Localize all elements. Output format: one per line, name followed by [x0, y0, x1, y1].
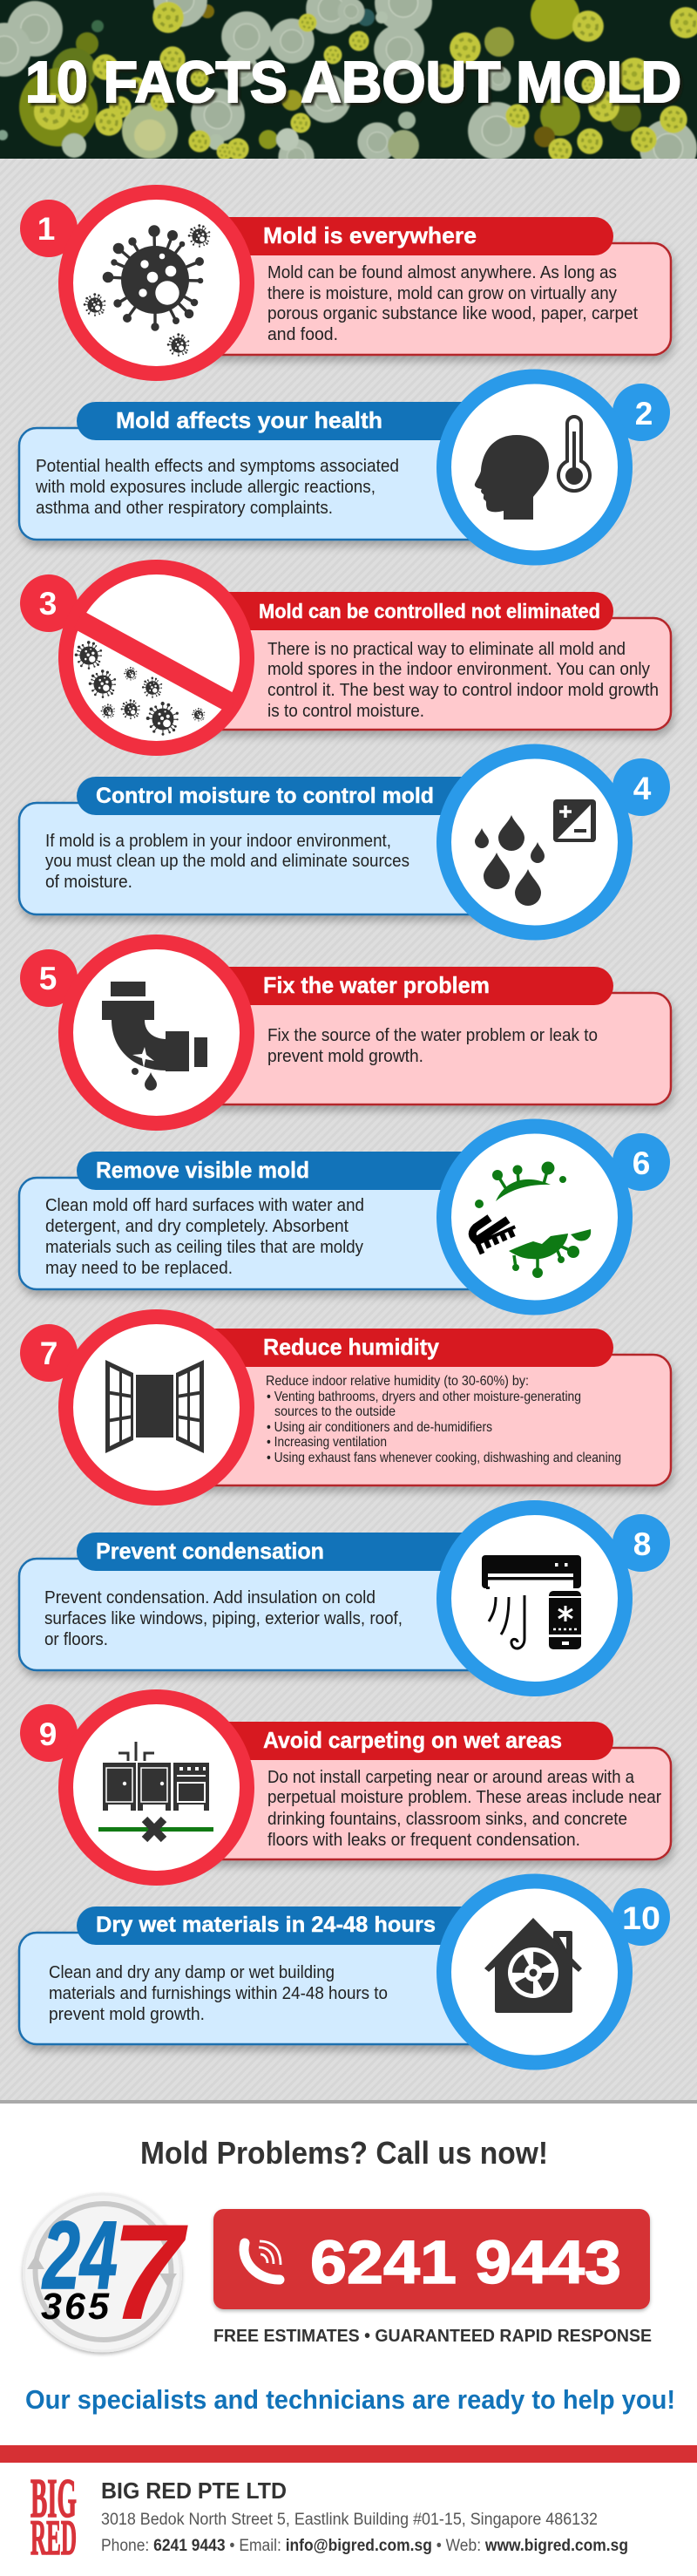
panel: fact 10	[19, 1881, 670, 2063]
text block: Do not install carpeting near or around areas with a	[267, 1767, 635, 1787]
card body	[19, 428, 542, 540]
icon: house with ventilation fan	[484, 1918, 582, 2013]
number: 2	[635, 396, 653, 432]
text block: there is moisture, mold can grow on virtually any	[267, 283, 618, 303]
text block: may need to be replaced.	[45, 1258, 233, 1278]
company name: BIG RED PTE LTD	[101, 2477, 287, 2504]
card body	[174, 1748, 671, 1859]
heading bar	[174, 967, 613, 1005]
text block: Clean and dry any damp or wet building	[49, 1962, 335, 1982]
text block: detergent, and dry completely. Absorbent	[45, 1216, 348, 1236]
icon ring	[66, 567, 247, 748]
icon ring	[444, 1126, 626, 1308]
heading: Reduce humidity	[263, 1334, 440, 1360]
text block: control it. The best way to control indoor mold growth	[267, 680, 659, 700]
text block: Mold can be found almost anywhere. As long as	[267, 262, 617, 282]
panel: fact 4	[19, 751, 670, 933]
icon: open window	[105, 1360, 204, 1453]
icon ring	[444, 1508, 626, 1689]
icon: kitchen cabinets with no carpet	[98, 1742, 213, 1839]
phone number: 6241 9443	[310, 2228, 621, 2296]
number: 5	[39, 961, 57, 996]
number: 8	[633, 1526, 651, 1562]
badge: 24/7 365: 24	[42, 2202, 118, 2309]
number badge	[20, 1324, 78, 1382]
card body	[174, 993, 671, 1104]
text block: Fix the source of the water problem or leak to	[267, 1025, 598, 1045]
icon ring	[66, 941, 247, 1123]
text block	[266, 1374, 621, 1465]
panel: fact 1	[20, 192, 671, 373]
badge: 24/7 365: 365	[41, 2286, 110, 2328]
icon: leaking pipe	[102, 982, 207, 1091]
icon ring	[66, 192, 247, 373]
panel: company footer: BIG	[30, 2468, 77, 2529]
text block: • Using exhaust fans whenever cooking, dishwashing and cleaning	[267, 1451, 621, 1465]
card body	[19, 1178, 542, 1289]
text block: Clean mold off hard surfaces with water and	[45, 1195, 364, 1215]
text block: is to control moisture.	[267, 701, 424, 721]
icon: air conditioner and remote	[482, 1555, 581, 1649]
text block: Prevent condensation. Add insulation on cold	[44, 1587, 376, 1607]
heading: Control moisture to control mold	[96, 784, 434, 808]
heading: Remove visible mold	[96, 1157, 309, 1183]
panel: fact 8	[19, 1508, 670, 1689]
white section	[0, 2104, 697, 2576]
heading bar	[174, 1722, 613, 1760]
icon: phone	[244, 2241, 281, 2280]
text block	[45, 831, 409, 892]
badge: 24/7 365	[24, 2194, 188, 2351]
panel: fact 3	[20, 567, 671, 748]
number badge	[20, 574, 78, 632]
address: 3018 Bedok North Street 5, Eastlink Building #01-15, Singapore 486132	[101, 2511, 598, 2529]
icon ring	[444, 1881, 626, 2063]
card body	[19, 803, 542, 914]
text block: perpetual moisture problem. These areas include near	[267, 1787, 661, 1807]
text block: prevent mold growth.	[267, 1046, 423, 1066]
panel: company footer	[30, 2468, 628, 2566]
text block: asthma and other respiratory complaints.	[36, 498, 333, 518]
text block: materials and furnishings within 24-48 hours to	[49, 1983, 388, 2003]
number badge	[20, 949, 78, 1007]
card body	[174, 1355, 671, 1485]
text block: floors with leaks or frequent condensation.	[267, 1830, 580, 1850]
contact details: Phone: 6241 9443 • Email: info@bigred.com.sg • Web: www.bigred.com.sg	[101, 2537, 628, 2555]
number: 10	[622, 1900, 660, 1936]
icon ring	[444, 377, 626, 558]
number badge	[612, 758, 670, 816]
heading bar	[174, 217, 613, 255]
panel: call to action	[0, 2100, 697, 2576]
header banner photo	[0, 0, 697, 177]
number badge	[612, 1514, 670, 1572]
heading bar	[77, 777, 565, 815]
text block: and food.	[267, 324, 338, 344]
number: 3	[39, 586, 57, 622]
card body	[19, 1559, 542, 1670]
heading: Avoid carpeting on wet areas	[263, 1727, 562, 1753]
text block: If mold is a problem in your indoor environment,	[45, 831, 391, 851]
icon: brush scrubbing mold	[472, 1161, 591, 1278]
text block	[45, 1195, 364, 1278]
heading bar	[77, 1907, 565, 1945]
text block: of moisture.	[45, 872, 132, 892]
text block: or floors.	[44, 1629, 108, 1649]
text block: prevent mold growth.	[49, 2004, 205, 2024]
text block: mold spores in the indoor environment. You can only	[267, 659, 651, 679]
panel: fact 5	[20, 941, 671, 1123]
text block	[267, 262, 638, 344]
footer band	[0, 2445, 697, 2463]
icon: mold spores	[84, 224, 210, 357]
tagline: FREE ESTIMATES • GUARANTEED RAPID RESPONSE	[213, 2326, 652, 2346]
text block	[267, 1767, 661, 1850]
prohibition bar	[78, 620, 233, 704]
textured background	[0, 159, 697, 2107]
icon: head and thermometer	[475, 417, 590, 520]
heading: Dry wet materials in 24-48 hours	[96, 1913, 436, 1937]
panel: fact 7	[20, 1316, 671, 1498]
text block	[267, 639, 659, 721]
heading: Fix the water problem	[263, 972, 490, 998]
text block: • Using air conditioners and de-humidifiers	[267, 1420, 492, 1435]
text block	[267, 1025, 598, 1066]
text block: surfaces like windows, piping, exterior walls, roof,	[44, 1608, 403, 1628]
panel: fact 2	[19, 377, 670, 558]
heading bar	[77, 402, 565, 440]
heading bar	[174, 592, 613, 630]
heading: Prevent condensation	[96, 1538, 324, 1564]
number badge	[612, 1888, 670, 1946]
number: 9	[39, 1716, 57, 1752]
number badge	[612, 1133, 670, 1191]
badge: 24/7 365: 7	[112, 2197, 188, 2348]
icon ring	[66, 1696, 247, 1878]
heading: Mold can be controlled not eliminated	[259, 600, 600, 622]
text block	[49, 1962, 388, 2024]
text block: materials such as ceiling tiles that are moldy	[45, 1237, 364, 1257]
heading bar	[174, 1329, 613, 1367]
text block	[35, 456, 399, 518]
icon ring	[66, 1316, 247, 1498]
text block: drinking fountains, classroom sinks, and concrete	[267, 1809, 627, 1829]
icon: spores	[75, 641, 205, 736]
heading bar	[77, 1152, 565, 1190]
number: 1	[37, 211, 55, 247]
text block: There is no practical way to eliminate all mold and	[267, 639, 626, 659]
heading: Mold is everywhere	[263, 222, 477, 248]
heading: Mold Problems? Call us now!	[140, 2135, 548, 2171]
text block: • Venting bathrooms, dryers and other moisture-generating	[267, 1390, 581, 1404]
heading bar	[77, 1533, 565, 1571]
number badge	[20, 200, 78, 257]
number badge	[20, 1704, 78, 1762]
icon: water drops and humidity	[475, 799, 596, 906]
icon ring	[444, 751, 626, 933]
heading: Mold affects your health	[116, 407, 382, 433]
title: 10 FACTS ABOUT MOLD	[25, 50, 681, 115]
phone button	[213, 2209, 650, 2309]
text block: • Increasing ventilation	[267, 1435, 387, 1450]
panel: fact 6	[19, 1126, 670, 1308]
text block: porous organic substance like wood, paper, carpet	[267, 303, 638, 323]
text block	[44, 1587, 403, 1649]
text block: you must clean up the mold and eliminate sources	[45, 851, 409, 871]
number: 7	[40, 1336, 58, 1371]
number: 6	[633, 1145, 650, 1181]
card body	[174, 243, 671, 355]
panel: company footer: RED	[30, 2511, 77, 2566]
card body	[174, 618, 671, 730]
logo: Big Red	[30, 2468, 77, 2566]
number badge	[612, 384, 670, 441]
text block: Reduce indoor relative humidity (to 30-60%) by:	[266, 1374, 529, 1389]
number: 4	[633, 771, 652, 806]
panel: fact 9	[20, 1696, 671, 1878]
card body	[19, 1933, 542, 2044]
text block: sources to the outside	[274, 1404, 396, 1419]
text block: Potential health effects and symptoms associated	[36, 456, 399, 476]
text block: with mold exposures include allergic reactions,	[35, 477, 376, 497]
